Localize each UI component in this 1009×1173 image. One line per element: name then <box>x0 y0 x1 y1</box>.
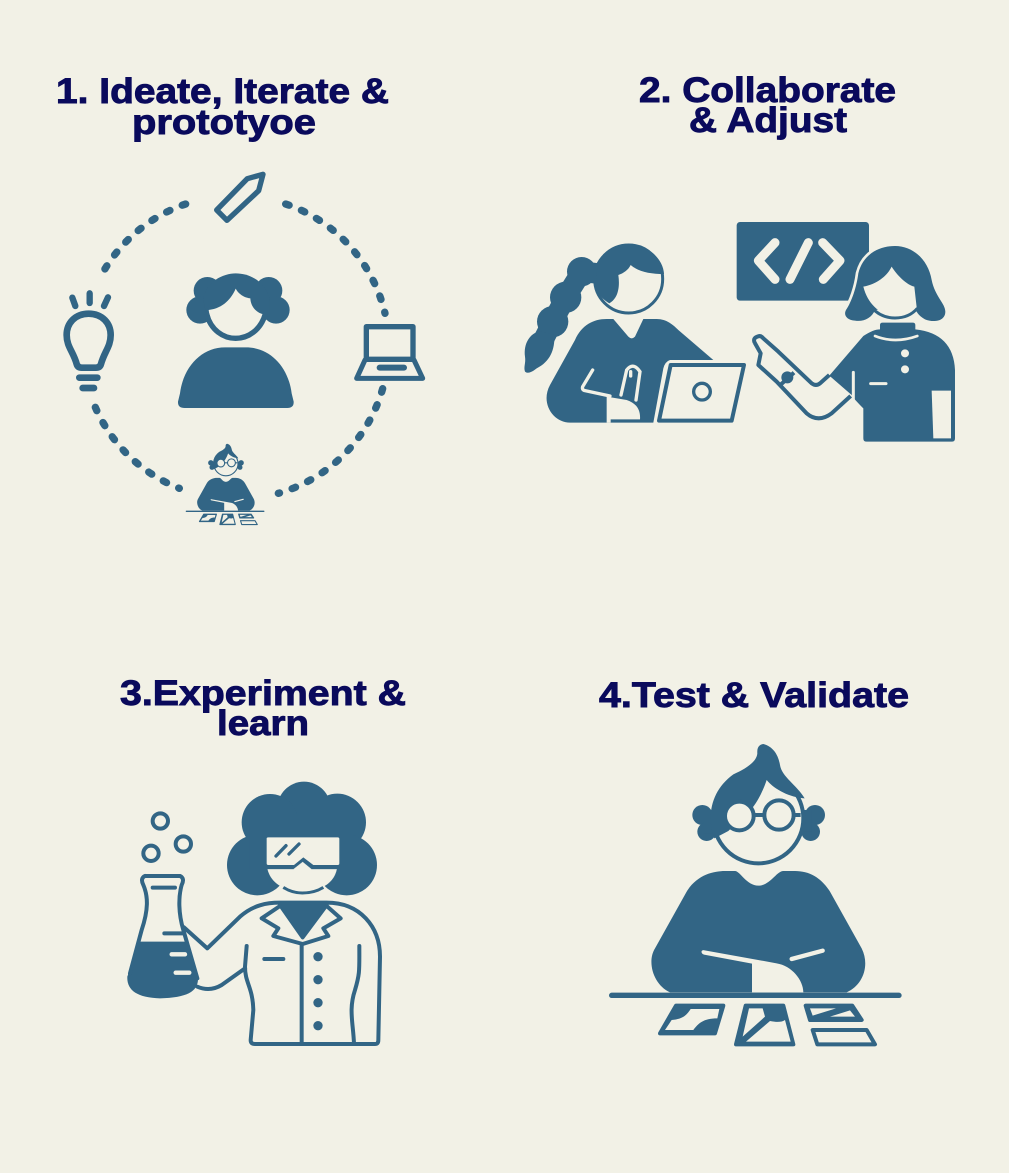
title: step 2 <box>639 71 896 140</box>
title: step 3 <box>120 674 406 743</box>
cards <box>660 1006 875 1044</box>
icon: pencil <box>217 174 263 220</box>
torso <box>651 871 865 992</box>
title: step 2: 2. Collaborate <box>639 71 896 110</box>
dotted cycle ring <box>95 204 385 493</box>
icon: laptop <box>357 327 423 378</box>
figure: pointing woman <box>754 246 955 442</box>
figure: scientist head <box>227 782 377 895</box>
arms <box>702 950 823 992</box>
icon: light bulb <box>67 293 111 388</box>
icon: central person <box>178 273 294 408</box>
panel: scientist with flask <box>127 782 380 1044</box>
figure: lab coat <box>184 903 380 1044</box>
icon: laptop <box>659 365 744 421</box>
icon: code screen <box>737 222 869 301</box>
title: step 1 <box>56 72 389 142</box>
panel: ideate cycle <box>67 174 423 493</box>
small figure at desk <box>186 444 264 525</box>
title: step 1: prototyoe <box>132 103 316 142</box>
title: step 2: & Adjust <box>689 101 847 140</box>
table <box>612 987 899 1003</box>
head with glasses <box>692 744 825 863</box>
panel: collaborators <box>524 222 955 442</box>
title: step 3: 3.Experiment & <box>120 674 406 713</box>
title: step 1: 1. Ideate, Iterate & <box>56 72 389 111</box>
title: step 3: learn <box>217 704 309 743</box>
icon: flask with bubbles <box>127 813 198 998</box>
figure: woman with braid <box>524 244 744 423</box>
title: step 4: 4.Test & Validate <box>599 676 909 715</box>
panel: figure with glasses at table <box>612 744 899 1044</box>
